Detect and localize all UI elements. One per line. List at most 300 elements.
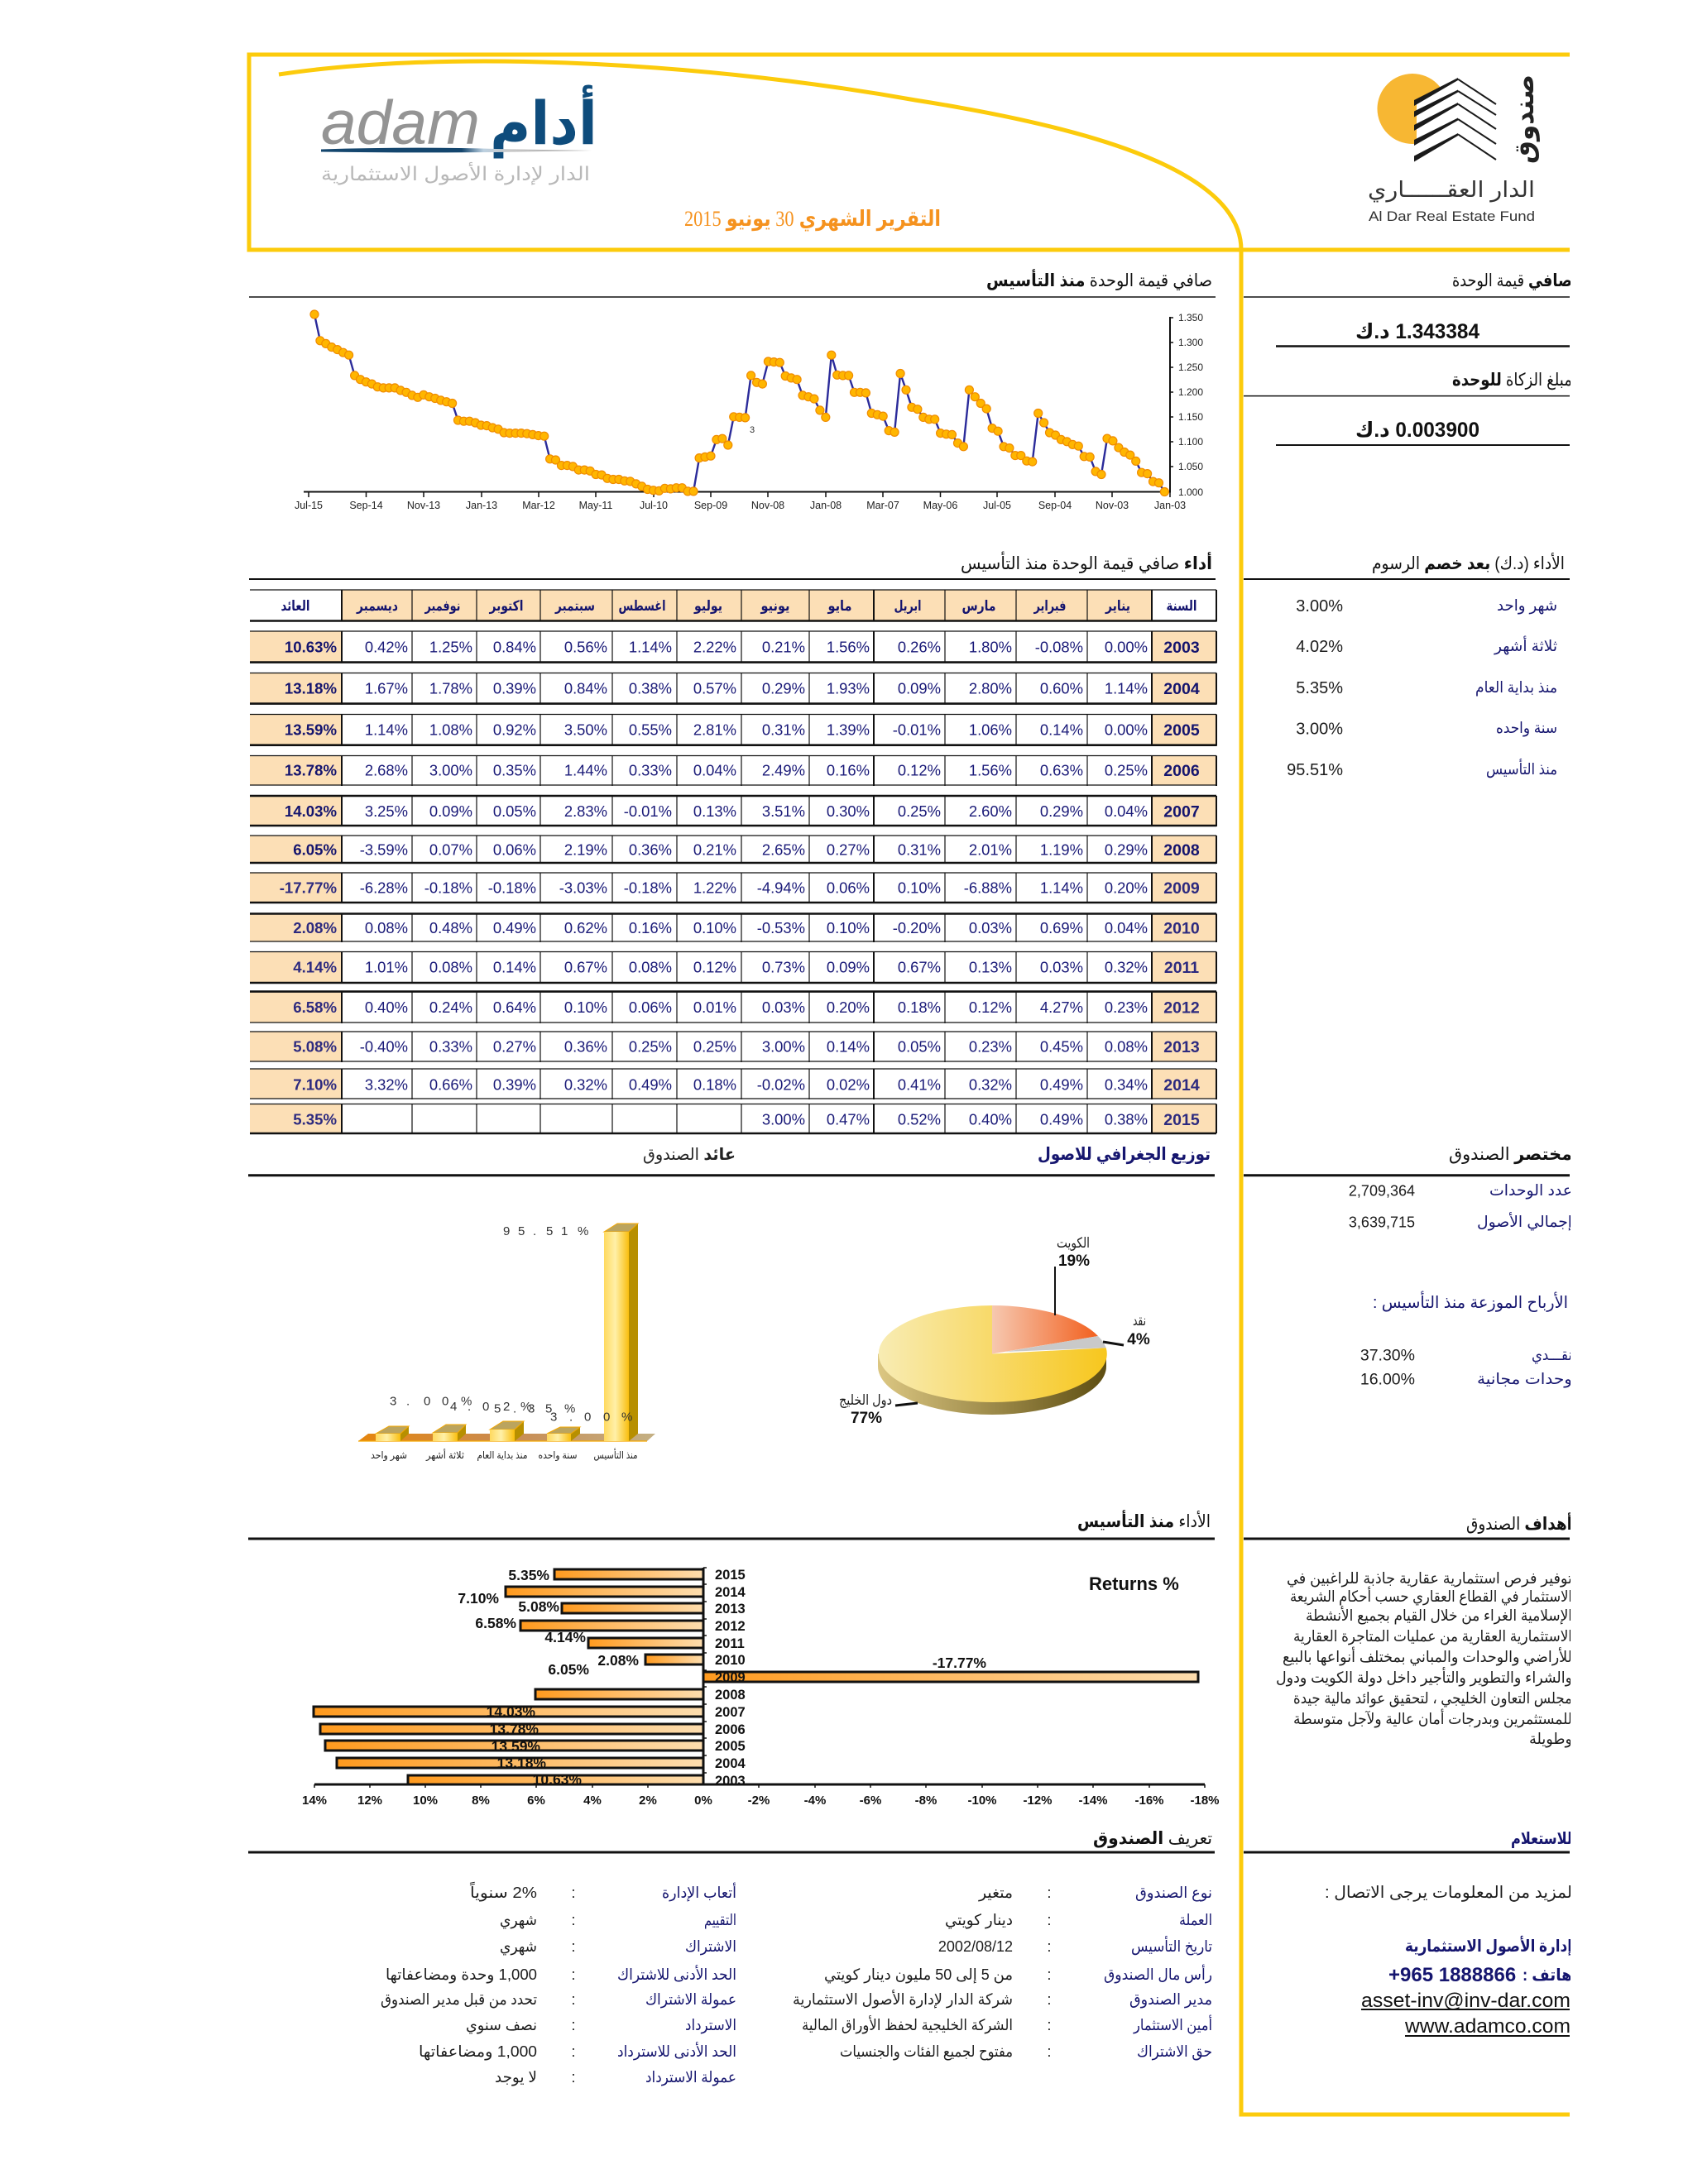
row 2014: 0.32% — [969, 1075, 1012, 1094]
pie chart: geographic allocation: 19% — [1058, 1252, 1090, 1270]
row 2008: -3.59% — [360, 841, 408, 859]
column: colons: : — [571, 2043, 576, 2060]
row 2006: 2.49% — [762, 761, 805, 779]
column: colons: : — [571, 1911, 576, 1928]
row 2014: 0.41% — [898, 1075, 941, 1094]
pie chart: geographic allocation: الكويت — [1057, 1235, 1090, 1251]
row 2007: 0.29% — [1040, 802, 1083, 820]
heading: NAV since inception: صافي قيمة الوحدة منذ التأسيس — [986, 268, 1212, 290]
row 2015 — [250, 1104, 1216, 1133]
column: colons — [571, 1884, 1052, 2086]
row 2012: 0.23% — [1105, 999, 1148, 1016]
3D bar chart: returns: 3.00% — [550, 1410, 632, 1425]
panel: fund summary: عدد الوحدات — [1489, 1181, 1572, 1200]
row 2003: 0.84% — [493, 639, 536, 655]
table header row: ديسمبر — [356, 598, 398, 615]
row 2004: 0.60% — [1040, 680, 1083, 697]
panel: fund objectives: مجلس التعاون الخليجي ، لتحقيق عوائد مالية جيدة — [1293, 1689, 1572, 1707]
bar chart: annual returns: -2% — [748, 1794, 770, 1808]
row 2004: 0.39% — [493, 680, 536, 697]
panel: contact: إدارة الأصول الاستثمارية — [1405, 1935, 1572, 1956]
row 2010 — [250, 913, 1216, 941]
panel: fund objectives: الاستثمارية العقارية من عمليات المتاجرة العقارية — [1293, 1627, 1572, 1645]
column: fund facts labels: رأس مال الصندوق — [1104, 1964, 1212, 1984]
row 2005: 0.55% — [629, 721, 672, 738]
column: colons: : — [571, 1966, 576, 1983]
row 2005: -0.01% — [893, 721, 941, 738]
column: fund facts labels: حق الاشتراك — [1137, 2043, 1212, 2061]
logo: Al Dar Real Estate Fund — [1368, 74, 1540, 224]
row 2013: 0.05% — [898, 1037, 941, 1056]
row 2006: 1.44% — [564, 761, 607, 779]
column: fund facts values — [793, 1884, 1013, 2061]
column: subscription values: نصف سنوي — [466, 2016, 537, 2034]
panel: contact: للاستعلام — [1511, 1830, 1572, 1848]
bar chart: annual returns: 2% — [639, 1794, 657, 1808]
bar: three months — [433, 1425, 466, 1441]
bar chart: annual returns: 6% — [527, 1794, 545, 1808]
column: subscription labels: الحد الأدنى للاشتراك — [617, 1965, 736, 1984]
row 2010: 0.62% — [564, 919, 607, 936]
line chart: NAV: Sep-14 — [349, 500, 383, 511]
row 2004: 1.93% — [827, 680, 870, 697]
line chart: NAV: Nov-08 — [751, 500, 784, 511]
panel: performance after fees: الأداء (د.ك) بعد خصم الرسوم — [1372, 553, 1565, 573]
panel: fund summary — [1244, 1145, 1572, 1388]
line chart: NAV: Jul-15 — [295, 500, 323, 511]
panel: performance after fees: 4.02% — [1296, 638, 1343, 656]
heading: geographic distribution and fund return — [248, 1145, 1215, 1176]
row 2011: 1.01% — [365, 958, 408, 976]
column: fund facts labels: أمين الاستثمار — [1133, 2014, 1212, 2034]
row 2007: 2.60% — [969, 802, 1012, 820]
row 2004: 1.14% — [1105, 680, 1148, 697]
row 2011: 0.32% — [1105, 958, 1148, 976]
row 2007: 0.25% — [898, 802, 941, 820]
row 2010: 0.08% — [365, 919, 408, 936]
row 2006 — [250, 756, 1216, 785]
row 2013: -0.40% — [360, 1037, 408, 1056]
row 2007: 0.04% — [1105, 802, 1148, 820]
3D bar chart: returns: منذ التأسيس — [594, 1448, 637, 1462]
row 2006: 13.78% — [285, 761, 337, 779]
row 2010: -0.53% — [757, 919, 805, 936]
table header row: ابريل — [894, 598, 922, 615]
panel: fund objectives: الاستثمار في القطاع العقاري حسب أحكام الشريعة — [1290, 1586, 1572, 1606]
line chart: NAV: Jul-10 — [640, 500, 668, 511]
row 2003 — [250, 631, 1216, 663]
row 2012: 4.27% — [1040, 999, 1083, 1016]
column: subscription labels: عمولة الاسترداد — [645, 2068, 736, 2086]
line chart: NAV: Jan-13 — [466, 500, 497, 511]
column: colons: : — [571, 2068, 576, 2086]
row 2011: 0.14% — [493, 958, 536, 976]
row 2007: 14.03% — [285, 802, 337, 820]
logo: Al Dar Real Estate Fund: Al Dar Real Estate Fund — [1369, 208, 1535, 224]
row 2014: 0.02% — [827, 1075, 870, 1094]
bar: since inception — [604, 1224, 638, 1441]
column: subscription values: شهري — [500, 1911, 537, 1929]
row 2006: 0.63% — [1040, 761, 1083, 779]
table header row: نوفمبر — [424, 598, 460, 615]
column: subscription labels: الاسترداد — [685, 2016, 736, 2034]
row 2012: 0.03% — [762, 999, 805, 1016]
panel: contact — [1244, 1830, 1572, 2038]
bar chart: annual returns: 2004 — [715, 1756, 746, 1771]
line chart: NAV: 1.050 — [1178, 461, 1203, 472]
row 2013: 0.33% — [429, 1037, 472, 1056]
row 2014: 2014 — [1163, 1076, 1200, 1094]
row 2005: 1.06% — [969, 721, 1012, 738]
column: fund facts values: الشركة الخليجية لحفظ الأوراق المالية — [802, 2015, 1013, 2034]
column: fund facts values: 2002/08/12 — [938, 1938, 1013, 1955]
row 2005: 2.81% — [693, 721, 736, 738]
row 2008: 2.65% — [762, 841, 805, 859]
panel: contact: هاتف : — [1523, 1966, 1572, 1985]
column: fund facts values: دينار كويتي — [945, 1911, 1013, 1929]
row 2015: 0.52% — [898, 1110, 941, 1128]
row 2013: 0.08% — [1105, 1037, 1148, 1056]
column: fund facts values: من 5 إلى 50 مليون دينار كويتي — [824, 1966, 1013, 1984]
column: subscription values: لا يوجد — [495, 2068, 537, 2086]
row 2014: 0.39% — [493, 1075, 536, 1094]
column: fund facts labels: العملة — [1179, 1911, 1212, 1928]
row 2008 — [250, 836, 1216, 863]
bar chart: annual returns: -4% — [804, 1794, 826, 1808]
column: colons: : — [571, 1990, 576, 2008]
bar chart: annual returns: 2010 — [715, 1653, 746, 1668]
row 2009: -17.77% — [280, 879, 337, 897]
row 2010: 0.48% — [429, 919, 472, 936]
row 2011: 0.73% — [762, 958, 805, 976]
bar chart: annual returns: -14% — [1078, 1794, 1108, 1808]
row 2010: 0.69% — [1040, 919, 1083, 936]
panel: unit value: 0.003900 د.ك — [1355, 419, 1479, 442]
column: colons: : — [1047, 2016, 1052, 2033]
row 2008: 0.29% — [1105, 841, 1148, 859]
row 2015: 0.38% — [1105, 1110, 1148, 1128]
row 2013: 0.45% — [1040, 1037, 1083, 1056]
row 2014 — [250, 1069, 1216, 1099]
line chart: NAV: Nov-13 — [407, 500, 440, 511]
row 2011: 2011 — [1164, 959, 1199, 977]
row 2011: 0.08% — [429, 958, 472, 976]
3D bar chart: returns: 4.02% — [450, 1400, 531, 1414]
panel: contact: لمزيد من المعلومات يرجى الاتصال : — [1325, 1884, 1572, 1902]
row 2003: 0.26% — [898, 639, 941, 655]
column: fund facts values: متغير — [978, 1884, 1013, 1902]
panel: fund objectives: توفير فرص استثمارية عقارية جاذبة للراغبين في — [1287, 1569, 1572, 1588]
row 2015: 2015 — [1163, 1111, 1200, 1129]
row 2011 — [250, 951, 1216, 983]
row 2004: 1.67% — [365, 680, 408, 697]
row 2005: 0.00% — [1105, 721, 1148, 738]
row 2011: 0.67% — [564, 958, 607, 976]
panel: fund objectives: وطويلة — [1529, 1730, 1572, 1748]
row 2005: 0.92% — [493, 721, 536, 738]
panel: performance after fees: 5.35% — [1296, 679, 1343, 697]
column: fund facts labels: تاريخ التأسيس — [1131, 1936, 1212, 1956]
table header row: السنة — [1167, 598, 1196, 614]
row 2003: 2003 — [1163, 639, 1200, 657]
line chart: NAV: Jul-05 — [983, 500, 1011, 511]
row 2011: 0.12% — [693, 958, 736, 976]
panel: performance after fees: 95.51% — [1287, 761, 1343, 779]
row 2009: -0.18% — [424, 879, 472, 897]
bar chart: annual returns: Returns % — [1089, 1573, 1179, 1594]
row 2015: 0.40% — [969, 1110, 1012, 1128]
row 2003: 0.21% — [762, 639, 805, 655]
bar chart: annual returns: 13.78% — [490, 1721, 539, 1737]
panel: unit value — [1244, 271, 1572, 445]
panel: unit value: 1.343384 د.ك — [1355, 320, 1479, 343]
column: subscription values: 1,000 ومضاعفاتها — [419, 2043, 537, 2061]
yellow header frame and column rule — [249, 55, 1570, 2115]
row 2010: 0.10% — [693, 919, 736, 936]
row 2012: 0.24% — [429, 999, 472, 1016]
row 2006: 0.16% — [827, 761, 870, 779]
row 2003: 1.25% — [429, 639, 472, 655]
column: subscription values: 2% سنوياً — [469, 1881, 537, 1902]
panel: fund summary: إجمالي الأصول — [1477, 1212, 1572, 1231]
bar chart: annual returns: 2003 — [715, 1774, 746, 1789]
row 2011: 0.13% — [969, 958, 1012, 976]
row 2006: 0.12% — [898, 761, 941, 779]
column: colons: : — [1047, 1911, 1052, 1928]
row 2010: 0.04% — [1105, 919, 1148, 936]
line chart: NAV: 1.150 — [1178, 411, 1203, 423]
bar chart: annual returns: 12% — [357, 1794, 382, 1808]
row 2010: 0.10% — [827, 919, 870, 936]
line chart: NAV: Jan-08 — [810, 500, 842, 511]
row 2007: 0.13% — [693, 802, 736, 820]
row 2007: 3.25% — [365, 802, 408, 820]
row 2014: 7.10% — [293, 1075, 337, 1094]
row 2005: 13.59% — [285, 721, 337, 738]
row 2007 — [250, 796, 1216, 826]
table: monthly returns — [244, 590, 1223, 1133]
bar chart: annual returns: 2.08% — [597, 1652, 639, 1669]
row 2012 — [250, 992, 1216, 1023]
row 2008: 0.36% — [629, 841, 672, 859]
row 2009 — [250, 873, 1216, 903]
line chart: NAV: Nov-03 — [1096, 500, 1129, 511]
row 2009: 0.06% — [827, 879, 870, 897]
row 2009: 0.10% — [898, 879, 941, 897]
row 2013: 0.36% — [564, 1037, 607, 1056]
bar chart: annual returns: -16% — [1134, 1794, 1164, 1808]
row 2012: 0.64% — [493, 999, 536, 1016]
bar chart: annual returns: 6.05% — [548, 1661, 589, 1678]
column: fund facts values: شركة الدار لإدارة الأصول الاستثمارية — [793, 1990, 1013, 2009]
column: subscription labels: عمولة الاشتراك — [645, 1990, 736, 2009]
bar chart: annual returns: -17.77% — [933, 1655, 986, 1671]
line chart: NAV: 1.250 — [1178, 362, 1203, 373]
row 2007: 3.51% — [762, 802, 805, 820]
row 2011: 0.09% — [827, 958, 870, 976]
panel: performance after fees: ثلاثة أشهر — [1494, 635, 1557, 655]
bar chart: annual returns: 2014 — [715, 1585, 746, 1600]
panel: fund summary: 3,639,715 — [1349, 1214, 1415, 1231]
column: subscription values: شهري — [500, 1937, 537, 1956]
heading: performance table: أداء صافي قيمة الوحدة منذ التأسيس — [961, 551, 1212, 573]
bar chart: annual returns: -6% — [860, 1794, 881, 1808]
bar chart: annual returns: -18% — [1190, 1794, 1220, 1808]
row 2012: 0.40% — [365, 999, 408, 1016]
bar chart: annual returns: 2013 — [715, 1602, 746, 1616]
row 2011: 0.67% — [898, 958, 941, 976]
bar chart: annual returns: 4.14% — [544, 1629, 586, 1645]
bar chart: annual returns: -10% — [967, 1794, 997, 1808]
panel: fund summary: وحدات مجانية — [1477, 1370, 1572, 1388]
row 2007: -0.01% — [624, 802, 672, 820]
panel: fund objectives: أهداف الصندوق — [1466, 1511, 1572, 1534]
column: colons: : — [571, 1937, 576, 1955]
row 2008: 0.07% — [429, 841, 472, 859]
column: subscription labels: أتعاب الإدارة — [662, 1882, 736, 1902]
row 2010: 0.16% — [629, 919, 672, 936]
row 2009: 0.20% — [1105, 879, 1148, 897]
bar chart: annual returns: 14% — [302, 1794, 327, 1808]
row 2007: 2.83% — [564, 802, 607, 820]
bar chart: annual returns: 5.35% — [508, 1567, 549, 1583]
row 2012: 0.20% — [827, 999, 870, 1016]
row 2008: 0.31% — [898, 841, 941, 859]
bar chart: annual returns: 8% — [472, 1794, 490, 1808]
bar chart: annual returns: 4% — [583, 1794, 602, 1808]
panel: performance after fees: منذ التأسيس — [1486, 759, 1557, 778]
panel: performance after fees: 3.00% — [1296, 720, 1343, 738]
pie chart: geographic allocation: 77% — [851, 1410, 882, 1427]
row 2004: 0.57% — [693, 680, 736, 697]
bar chart: annual returns: 5.08% — [518, 1598, 559, 1615]
row 2010: 2010 — [1163, 920, 1200, 938]
column: colons: : — [1047, 1966, 1052, 1983]
row 2004: 0.29% — [762, 680, 805, 697]
row 2013: 0.25% — [693, 1037, 736, 1056]
row 2012: 0.06% — [629, 999, 672, 1016]
row 2015: 0.47% — [827, 1110, 870, 1128]
row 2006: 0.35% — [493, 761, 536, 779]
row 2008: 0.21% — [693, 841, 736, 859]
table header row — [281, 590, 1196, 620]
panel: unit value: صافي قيمة الوحدة — [1452, 271, 1572, 290]
line chart: NAV: 1.000 — [1178, 486, 1203, 498]
row 2009: -0.18% — [488, 879, 536, 897]
row 2008: 2.19% — [564, 841, 607, 859]
column: colons: : — [1047, 1990, 1052, 2008]
row 2007: 2007 — [1163, 802, 1200, 821]
logo: adam — [321, 84, 597, 185]
row 2013: 0.25% — [629, 1037, 672, 1056]
row 2014: -0.02% — [757, 1075, 805, 1094]
row 2009: 1.14% — [1040, 879, 1083, 897]
logo: adam: أدام — [490, 84, 597, 158]
row 2004: 1.78% — [429, 680, 472, 697]
pie chart: geographic allocation — [839, 1235, 1150, 1427]
line chart: NAV: May-11 — [579, 500, 612, 511]
panel: performance after fees: منذ بداية العام — [1475, 678, 1557, 696]
bar chart: annual returns: 7.10% — [458, 1590, 499, 1607]
column: colons: : — [571, 1884, 576, 1901]
bar chart: annual returns: 0% — [694, 1794, 712, 1808]
column: subscription values: تحدد من قبل مدير الصندوق — [381, 1990, 537, 2009]
row 2004: 13.18% — [285, 680, 337, 697]
logo: adam: الدار لإدارة الأصول الاستثمارية — [321, 162, 590, 185]
row 2006: 0.04% — [693, 761, 736, 779]
row 2011: 0.08% — [629, 958, 672, 976]
row 2009: 2009 — [1163, 879, 1200, 898]
row 2013: 0.27% — [493, 1037, 536, 1056]
row 2011: 0.03% — [1040, 958, 1083, 976]
bar chart: annual returns: 2015 — [715, 1568, 746, 1583]
row 2009: -0.18% — [624, 879, 672, 897]
logo: adam: adam — [321, 88, 480, 157]
3D bar chart: returns: شهر واحد — [371, 1449, 407, 1462]
row 2012: 0.12% — [969, 999, 1012, 1016]
row 2012: 0.01% — [693, 999, 736, 1016]
bar chart: annual returns: 6.58% — [475, 1615, 516, 1631]
heading: geographic distribution and fund return: توزيع الجغرافي للاصول — [1038, 1145, 1211, 1164]
row 2014: 0.49% — [629, 1075, 672, 1094]
line chart: NAV: Mar-07 — [866, 500, 899, 511]
bar chart: annual returns: -8% — [915, 1794, 937, 1808]
row 2012: 6.58% — [293, 999, 337, 1016]
panel: fund summary: الأرباح الموزعة منذ التأسيس : — [1373, 1291, 1568, 1312]
3D bar chart: returns: سنة واحده — [538, 1449, 578, 1462]
row 2009: -6.28% — [360, 879, 408, 897]
panel: fund summary: 16.00% — [1360, 1370, 1415, 1388]
3D bar chart: returns: منذ بداية العام — [477, 1449, 528, 1461]
row 2004: 2.80% — [969, 680, 1012, 697]
row 2014: 0.32% — [564, 1075, 607, 1094]
bar chart: annual returns: 2011 — [715, 1636, 745, 1651]
table: fund definition terms — [381, 1881, 1212, 2086]
row 2005: 0.14% — [1040, 721, 1083, 738]
table header row: العائد — [281, 598, 309, 614]
column: colons: : — [571, 2016, 576, 2033]
row 2012: 2012 — [1163, 999, 1200, 1018]
bar chart: annual returns: 13.18% — [497, 1755, 546, 1771]
bar chart: annual returns: 2009 — [715, 1670, 746, 1685]
bar chart: annual returns: 10% — [413, 1794, 438, 1808]
row 2013: 0.14% — [827, 1037, 870, 1056]
panel: fund objectives: للمستثمرين وبدرجات أمان عالية ولآجل متوسطة — [1293, 1708, 1572, 1728]
panel: fund objectives: الإسلامية الغراء من خلال القيام بجميع الأنشطة — [1306, 1606, 1572, 1625]
row 2007: 0.30% — [827, 802, 870, 820]
logo: Al Dar Real Estate Fund: الدار العقــــــاري — [1368, 177, 1535, 202]
row 2005: 0.31% — [762, 721, 805, 738]
pie chart: geographic allocation: دول الخليج — [839, 1392, 892, 1409]
line chart: NAV: 1.200 — [1178, 386, 1203, 398]
row 2014: 3.32% — [365, 1075, 408, 1094]
table header row: فبراير — [1033, 598, 1066, 615]
line chart: NAV: 1.100 — [1178, 436, 1203, 448]
row 2007: 0.09% — [429, 802, 472, 820]
row 2003: -0.08% — [1035, 639, 1083, 655]
row 2003: 0.00% — [1105, 639, 1148, 655]
table header row: اغسطس — [619, 598, 665, 614]
pie chart: geographic allocation: 4% — [1127, 1331, 1150, 1348]
panel: fund objectives — [1244, 1511, 1572, 1748]
row 2008: 2008 — [1163, 841, 1200, 860]
column: subscription values: 1,000 وحدة ومضاعفاتها — [386, 1966, 537, 1984]
3D bar chart: returns — [358, 1224, 655, 1462]
panel: fund summary: 37.30% — [1360, 1347, 1415, 1365]
line chart: NAV — [295, 312, 1203, 511]
line chart: NAV: Jan-03 — [1154, 500, 1186, 511]
row 2010: 0.03% — [969, 919, 1012, 936]
